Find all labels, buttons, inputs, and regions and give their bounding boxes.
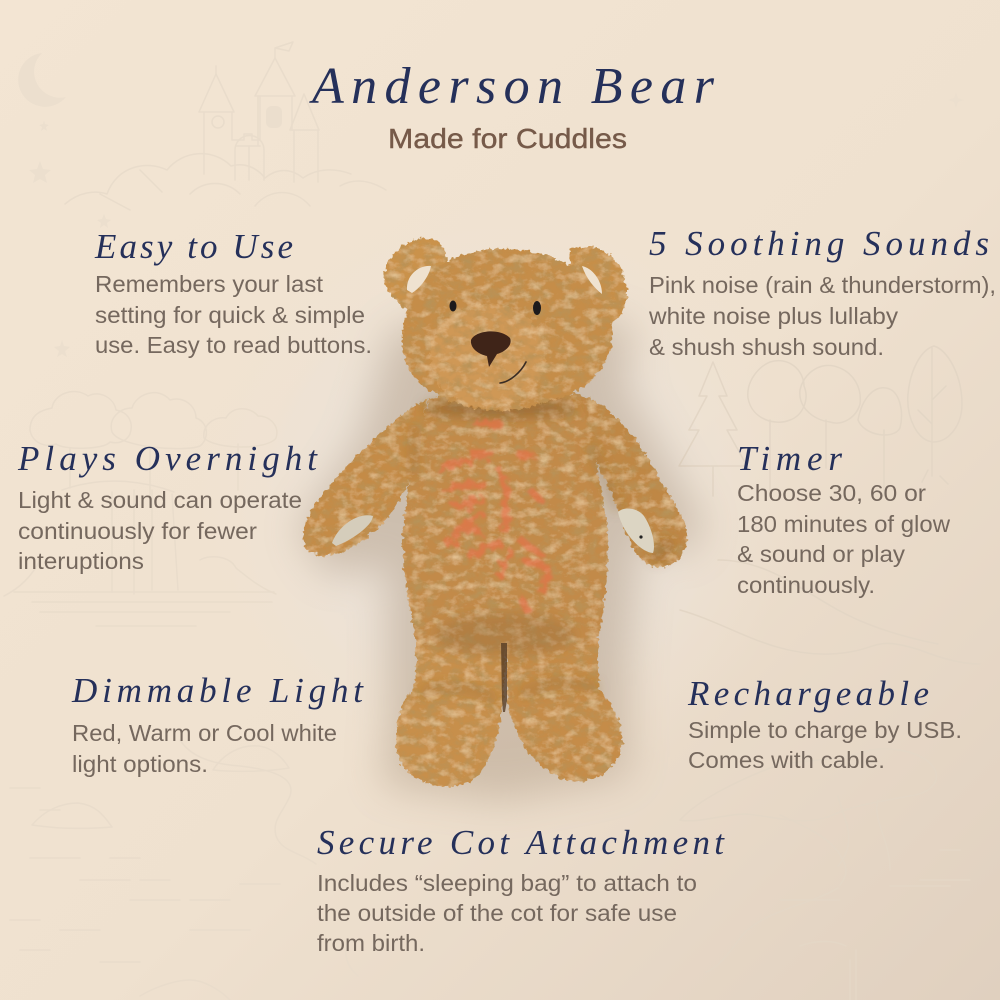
background line art: moon and stars [18,53,964,357]
feature: 5 soothing sounds: & shush shush sound. [649,334,884,360]
feature: rechargeable [687,674,962,773]
feature: timer: Choose 30, 60 or [737,480,926,506]
leg gap [501,643,507,712]
feature: timer: 180 minutes of glow [737,511,951,537]
bear eyes [450,300,541,315]
feature: easy to use: setting for quick & simple [95,302,365,328]
background line art: waterfall forest [4,392,277,626]
feature: easy to use: Remembers your last [95,271,323,297]
feature: plays overnight: Light & sound can operate [18,487,302,513]
bear paw pads [332,509,654,553]
feature: timer: Timer [737,439,842,478]
bear fur shading [412,398,670,700]
feature: dimmable light [71,671,364,777]
bear chest glow marks [440,424,548,612]
feature: secure cot attachment [317,823,725,956]
background line art: acacia tree and landscape [680,749,970,1000]
feature: easy to use: use. Easy to read buttons. [95,332,372,358]
feature: plays overnight: continuously for fewer [18,518,257,544]
feature: rechargeable: Simple to charge by USB. [688,717,962,743]
feature: plays overnight [17,439,318,574]
bear ears [384,238,627,323]
bear head [402,249,612,411]
feature: easy to use: Easy to Use [94,227,293,266]
feature: easy to use [94,227,372,358]
bear arms [303,393,687,568]
feature: secure cot attachment: Secure Cot Attachment [317,823,725,862]
feature: dimmable light: light options. [72,751,208,777]
feature: dimmable light: Dimmable Light [71,671,364,710]
feature: secure cot attachment: Includes “sleeping bag” to attach to [317,870,697,896]
bear nose and mouth [471,331,526,383]
feature: 5 soothing sounds: 5 Soothing Sounds [649,224,989,263]
bear shadow [298,305,703,800]
background line art: rivers and hills [10,740,358,1000]
feature: 5 soothing sounds: white noise plus lullaby [648,303,898,329]
feature: timer: & sound or play [737,541,905,567]
title: Anderson Bear [309,58,715,115]
bear legs [396,610,622,786]
feature: rechargeable: Comes with cable. [688,747,885,773]
feature: 5 soothing sounds [648,224,996,360]
bear body [403,392,608,654]
feature: timer: continuously. [737,572,875,598]
feature: 5 soothing sounds: Pink noise (rain & thunderstorm), [649,272,996,298]
background line art: castle on clouds [65,42,386,210]
bear inner ears [407,266,602,294]
feature: rechargeable: Rechargeable [687,674,929,713]
teddy bear [303,238,687,786]
feature: plays overnight: Plays Overnight [17,439,318,478]
feature: plays overnight: interuptions [18,548,144,574]
background line art: forest on the right [679,346,980,664]
feature: dimmable light: Red, Warm or Cool white [72,720,337,746]
feature: timer [737,439,951,598]
feature: secure cot attachment: the outside of the cot for safe use [317,900,677,926]
subtitle: Made for Cuddles [388,123,627,154]
feature: secure cot attachment: from birth. [317,930,425,956]
